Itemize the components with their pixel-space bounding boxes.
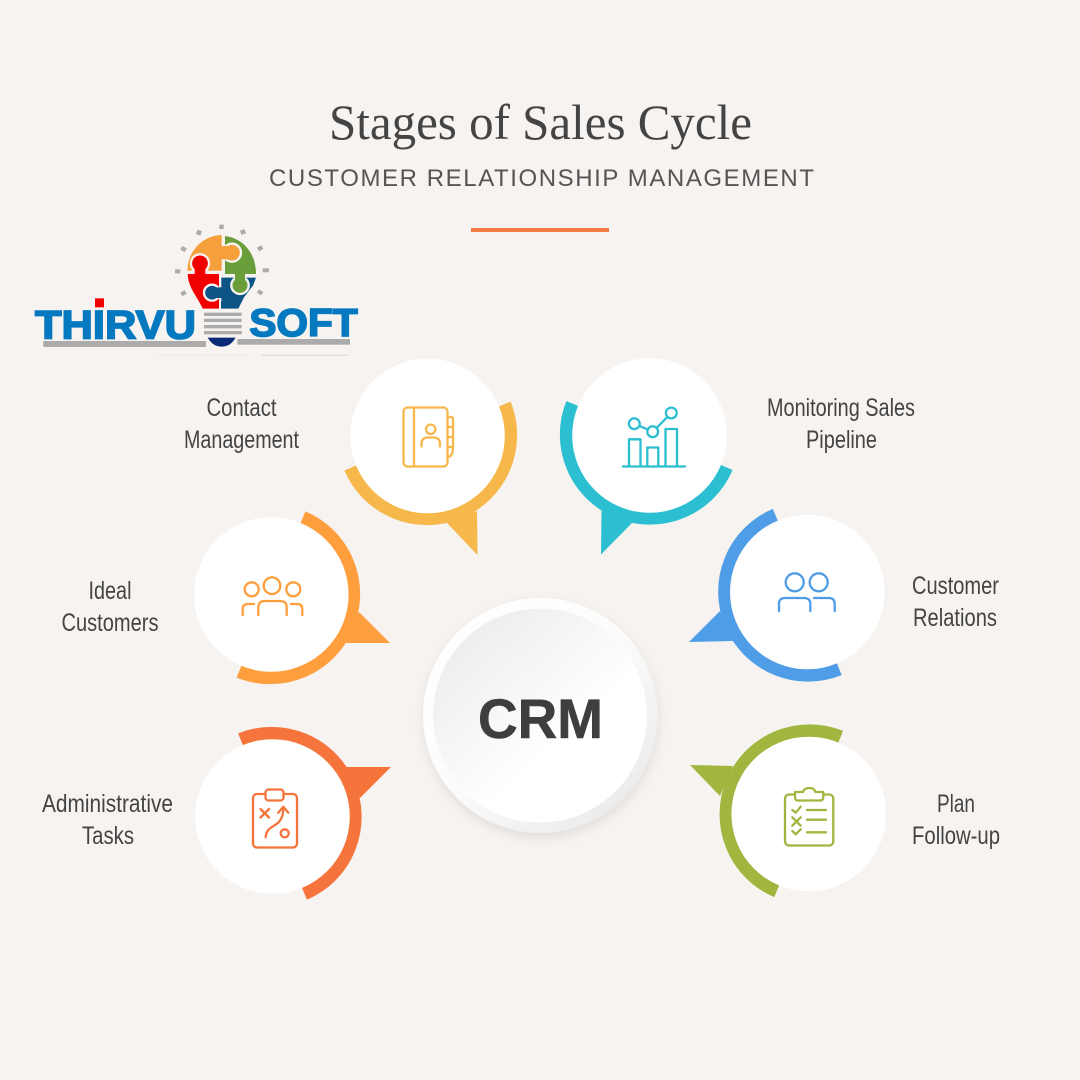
label: Monitoring Sales Pipeline: Pipeline xyxy=(806,426,877,454)
stage: Contact Management bubble xyxy=(350,359,511,555)
icon: address book xyxy=(404,408,453,466)
label: Administrative Tasks: Tasks xyxy=(82,822,134,850)
logo: Thirvu Soft: THIRVU xyxy=(35,303,196,347)
title underline xyxy=(471,228,609,232)
label: Ideal Customers xyxy=(62,577,158,637)
logo: Thirvu Soft xyxy=(34,224,358,356)
label: Contact Management: Management xyxy=(184,426,299,454)
label: Plan Follow-up: Follow-up xyxy=(912,822,1000,850)
subtitle: CUSTOMER RELATIONSHIP MANAGEMENT xyxy=(269,165,814,192)
label: Monitoring Sales Pipeline xyxy=(767,394,915,454)
label: Contact Management: Contact xyxy=(206,394,277,422)
stage: Monitoring Sales Pipeline bubble xyxy=(566,358,727,554)
icon: two people xyxy=(779,573,835,611)
label: Monitoring Sales Pipeline: Monitoring Sales xyxy=(767,394,915,422)
label: Contact Management xyxy=(184,394,299,454)
label: Plan Follow-up: Plan xyxy=(937,790,975,818)
icon: three people xyxy=(243,577,302,615)
label: Administrative Tasks: Administrative xyxy=(42,790,173,818)
icon: growth chart xyxy=(623,408,685,466)
label: Ideal Customers: Customers xyxy=(62,609,158,637)
stage: Administrative Tasks bubble xyxy=(195,733,391,894)
label: Customer Relations xyxy=(912,572,999,632)
center hub: CRM xyxy=(423,598,659,838)
label: Ideal Customers: Ideal xyxy=(88,577,132,605)
center hub: CRM: CRM xyxy=(478,687,603,750)
label: Plan Follow-up xyxy=(912,790,1000,850)
stage: Ideal Customers bubble xyxy=(194,517,390,678)
icon: checklist clipboard xyxy=(785,788,833,846)
logo: Thirvu Soft: SOFT xyxy=(249,301,358,345)
label: Customer Relations: Relations xyxy=(913,604,997,632)
icon: strategy clipboard xyxy=(253,790,297,848)
stage: Plan Follow-up bubble xyxy=(690,731,886,891)
stage: Customer Relations bubble xyxy=(689,515,885,675)
title: Stages of Sales Cycle xyxy=(329,94,752,150)
label: Customer Relations: Customer xyxy=(912,572,999,600)
label: Administrative Tasks xyxy=(42,790,173,850)
